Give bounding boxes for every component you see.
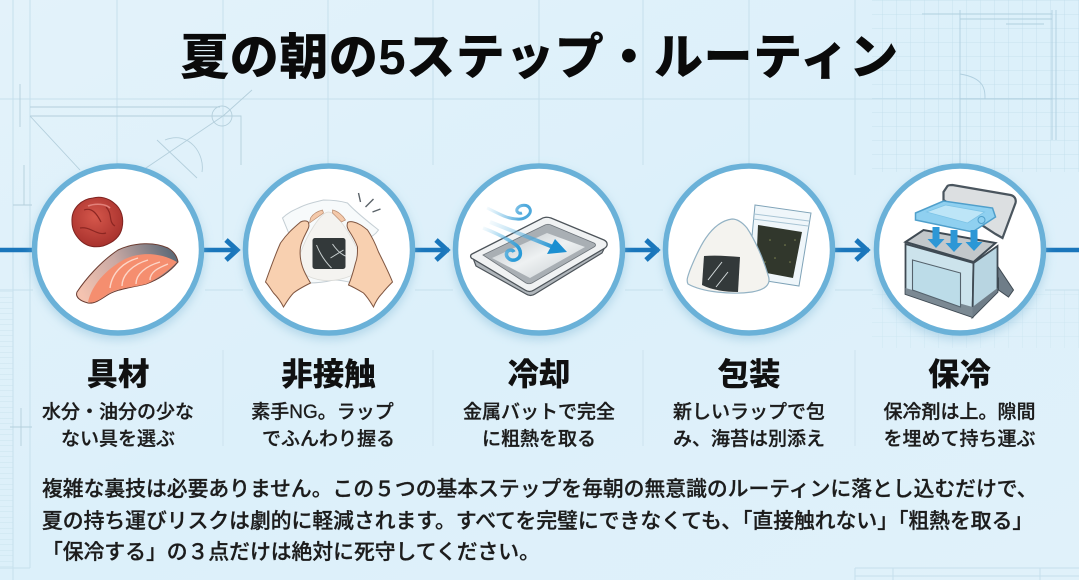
text: no contact	[251, 402, 395, 450]
arrow 3	[646, 240, 657, 260]
heading: cold storage: 保冷	[928, 356, 991, 392]
arrow 2	[436, 240, 447, 260]
heading: cooling: 冷却	[507, 356, 570, 392]
panel: step 4 packaging	[658, 163, 840, 450]
text block: summary: 夏の持ち運びリスクは劇的に軽減されます。すべてを完璧にできなくても、「直接触れない」「粗熱を取る」	[42, 510, 1033, 532]
text: packaging: 新しいラップで包	[673, 402, 825, 423]
icon: hands wrapping onigiri	[238, 163, 420, 344]
heading: no contact: 非接触	[281, 356, 376, 392]
text: cooling: に粗熱を取る	[482, 428, 596, 450]
title: 夏の朝の5ステップ・ルーティン	[180, 31, 899, 85]
text: packaging	[673, 402, 825, 450]
panel: step 5 cold storage	[870, 163, 1050, 450]
text block: summary	[42, 478, 1038, 564]
icon: wrapped onigiri and nori bag	[658, 163, 840, 344]
connector line with arrows	[0, 238, 1079, 262]
text: cooling	[463, 402, 615, 450]
text: cold storage: を埋めて持ち運ぶ	[883, 428, 1036, 450]
arrow 1	[226, 240, 237, 260]
text: ingredients	[42, 402, 194, 450]
text block: summary: 複雑な裏技は必要ありません。この５つの基本ステップを毎朝の無意識のルーティンに落とし込むだけで、	[42, 478, 1038, 501]
text: ingredients: 水分・油分の少な	[42, 402, 194, 423]
icon: umeboshi and salmon	[28, 163, 208, 344]
text: packaging: み、海苔は別添え	[673, 428, 825, 450]
text: no contact: 素手NG。ラップ	[251, 402, 394, 423]
text: cooling: 金属バットで完全	[463, 402, 615, 423]
panel: step 1 ingredients	[28, 163, 208, 450]
arrow 4	[856, 240, 867, 260]
text: cold storage	[883, 402, 1036, 450]
heading: ingredients: 具材	[86, 356, 150, 392]
text block: summary: 「保冷する」の３点だけは絶対に死守してください。	[42, 541, 540, 564]
heading: packaging: 包装	[717, 356, 780, 392]
text: no contact: でふんわり握る	[262, 428, 395, 450]
text: cold storage: 保冷剤は上。隙間	[883, 402, 1036, 423]
text: ingredients: ない具を選ぶ	[61, 428, 175, 450]
panel: step 2 no contact	[238, 163, 420, 450]
panel: step 3 cooling	[448, 163, 630, 450]
icon: cooler bag with ice pack	[870, 163, 1050, 344]
icon: metal tray with wind	[448, 163, 630, 344]
